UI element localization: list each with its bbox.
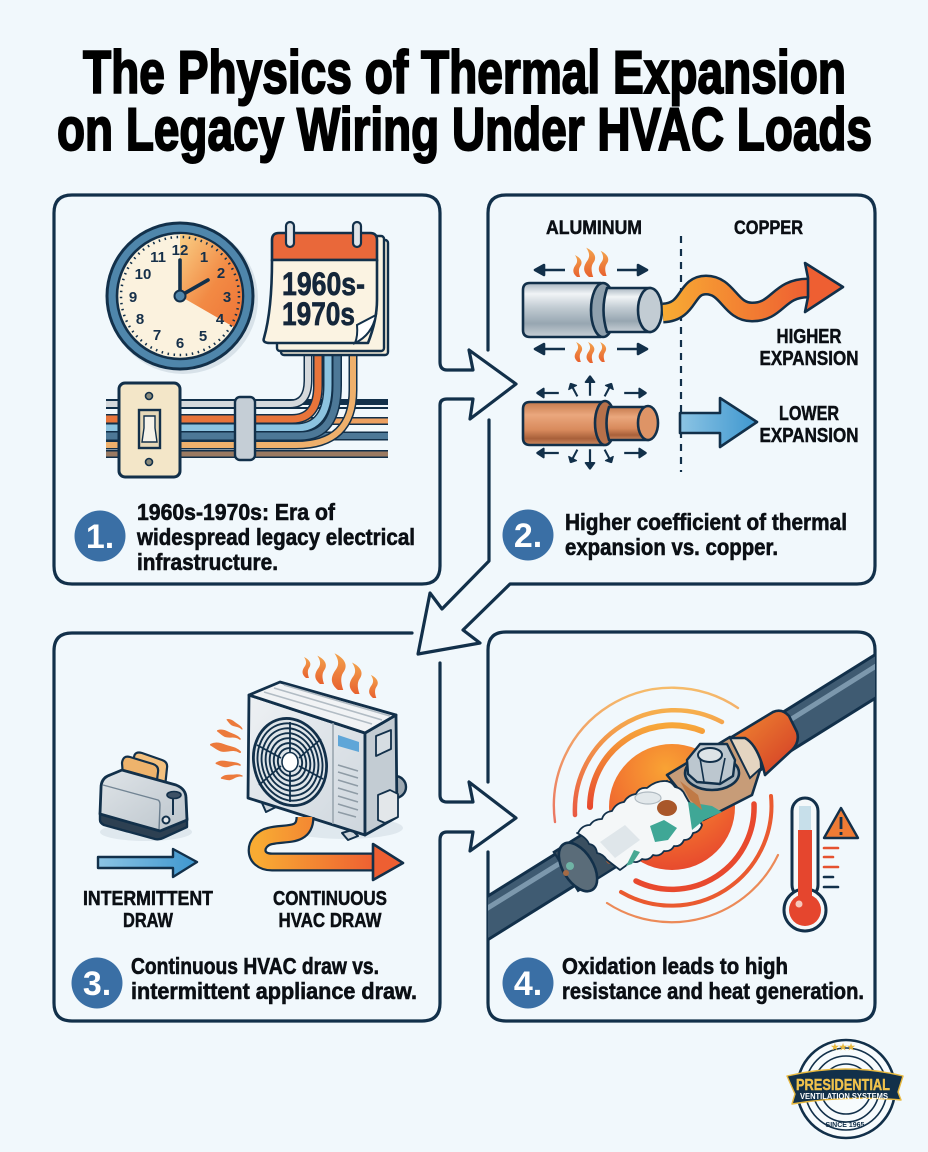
icon: light switch: [119, 383, 180, 477]
orange sleeve: [730, 711, 798, 775]
logo name: PRESIDENTIAL: [796, 1077, 890, 1094]
badge 1: [74, 510, 126, 562]
panel 1 border with arrow to panel 2: [54, 195, 516, 584]
panel 3 border with arrow to panel 4: [54, 633, 516, 1021]
icon: clock: 8: [136, 311, 144, 328]
label: continuous HVAC draw: HVAC DRAW: [278, 910, 382, 932]
panel 2 border with arrow to panel 3: [418, 195, 875, 654]
icon: heat waves above unit: [302, 653, 378, 698]
icon: heat flames on aluminum: [573, 248, 608, 363]
label: intermittent draw: [83, 888, 213, 932]
arrow: continuous HVAC draw: [257, 817, 403, 880]
icon: calendar: [264, 222, 388, 355]
icon: clock: 1: [200, 249, 208, 266]
badge 2: [502, 510, 554, 560]
heading: copper: COPPER: [734, 218, 803, 239]
panel 1: legacy era: [54, 195, 516, 584]
label: continuous HVAC draw: [273, 888, 387, 932]
label: continuous HVAC draw: CONTINUOUS: [273, 888, 387, 910]
divider: [680, 236, 682, 472]
caption 1: infrastructure.: [137, 549, 278, 575]
panel 4 border: [488, 632, 875, 1021]
hex nut: [684, 763, 740, 792]
logo stars: ★★★: [831, 1042, 856, 1052]
label: higher expansion: EXPANSION: [760, 348, 858, 370]
connector lug: [667, 737, 760, 820]
icon: clock: 6: [176, 335, 184, 352]
icon: clock: 9: [129, 289, 137, 306]
badge 2: 2.: [514, 517, 542, 555]
icon: clock: 10: [135, 266, 151, 283]
expansion arrows on copper: [537, 376, 646, 469]
logo banner: [787, 1069, 903, 1104]
label: lower expansion: LOWER: [779, 403, 839, 425]
icon: copper wire: [523, 401, 658, 445]
icon: calendar: 1960s-: [282, 266, 365, 302]
icon: clock: 3: [223, 289, 231, 306]
label: lower expansion: [760, 403, 858, 447]
icon: clock: 11: [150, 249, 166, 266]
caption 3: Continuous HVAC draw vs.: [131, 953, 379, 979]
label: intermittent draw: DRAW: [123, 910, 173, 932]
caption 2: expansion vs. copper.: [565, 534, 778, 560]
temperature ticks: [824, 848, 838, 887]
label: intermittent draw: INTERMITTENT: [83, 888, 213, 910]
icon: clock: 7: [153, 327, 161, 344]
badge 1: 1.: [86, 518, 114, 556]
label: higher expansion: [760, 326, 858, 370]
icon: wire clamp: [235, 397, 255, 460]
panel 4: oxidation and heat: [470, 632, 900, 1021]
caption 4: [562, 953, 864, 1004]
icon: clock: 2: [217, 265, 225, 282]
heat rings: [554, 688, 778, 922]
badge 4: 4.: [514, 965, 542, 1003]
icon: calendar: 1970s: [282, 296, 355, 332]
title: [57, 39, 872, 163]
badge 4: [502, 958, 554, 1008]
caption 1: [136, 499, 415, 575]
icon: warning triangle: [824, 808, 858, 838]
panel 2: expansion comparison: [418, 195, 875, 654]
icon: heat waves left of unit: [211, 719, 244, 783]
label: lower expansion: EXPANSION: [760, 425, 858, 447]
expansion arrows on aluminum: [535, 265, 647, 354]
caption 4: resistance and heat generation.: [562, 978, 864, 1004]
caption 1: 1960s-1970s: Era of: [137, 499, 335, 525]
icon: toaster: [100, 752, 192, 841]
icon: aluminum wire: [523, 283, 662, 337]
caption 4: Oxidation leads to high: [562, 953, 788, 979]
logo date: SINCE 1965: [826, 1122, 865, 1129]
corrosion: [577, 781, 702, 870]
heading: aluminum: ALUMINUM: [546, 218, 642, 239]
arrow: higher expansion: [663, 263, 843, 313]
badge 3: [72, 958, 122, 1008]
icon: clock: 12: [172, 242, 188, 259]
label: higher expansion: HIGHER: [776, 326, 842, 348]
icon: wires bundle: [106, 350, 388, 460]
icon: clock: 5: [199, 328, 207, 345]
caption 3: [131, 953, 417, 1004]
arrow: intermittent draw: [98, 849, 197, 877]
arrow: lower expansion: [680, 398, 757, 447]
icon: HVAC outdoor unit: [244, 682, 406, 840]
logo: Presidential Ventilation Systems: [787, 1038, 903, 1140]
badge 3: 3.: [83, 965, 111, 1003]
caption 2: [565, 509, 847, 560]
logo subtitle: VENTILATION SYSTEMS: [800, 1091, 888, 1101]
icon: clock: [107, 223, 258, 374]
icon: cable and corroded connector: [470, 651, 900, 929]
panel 3: load comparison: [54, 633, 516, 1021]
caption 1: widespread legacy electrical: [136, 524, 415, 550]
icon: clock: 4: [216, 311, 225, 328]
caption 3: intermittent appliance draw.: [131, 978, 417, 1004]
icon: thermometer: [784, 798, 826, 931]
caption 2: Higher coefficient of thermal: [565, 509, 847, 535]
